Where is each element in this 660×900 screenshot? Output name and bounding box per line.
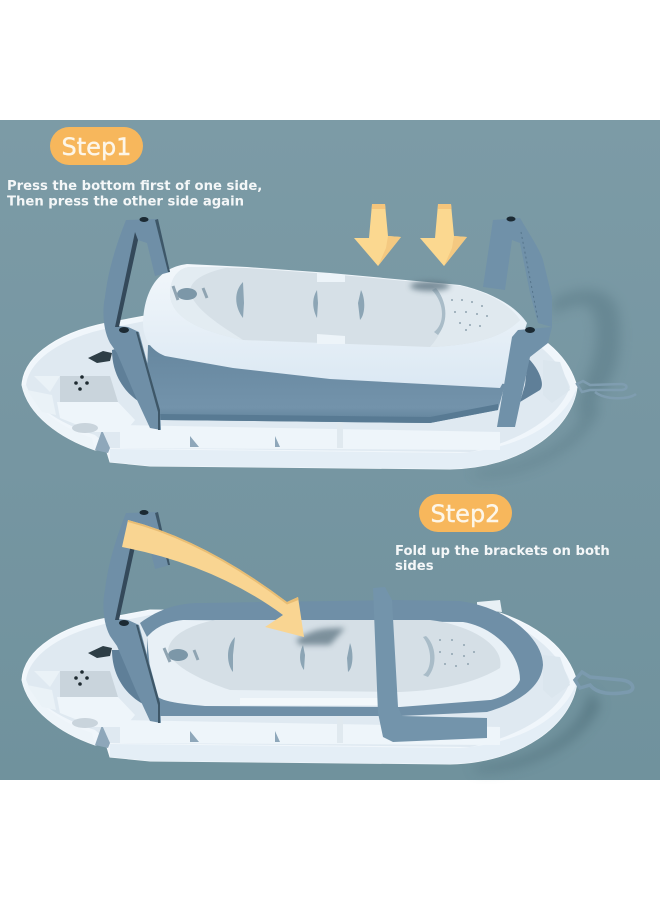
step 2 left bracket bbox=[103, 510, 170, 723]
step 2 bath base tray bbox=[22, 610, 577, 764]
step 2 perforated seat panel bbox=[439, 639, 475, 667]
step 2 seat ridges bbox=[228, 637, 352, 672]
step 2 tub illustration bbox=[22, 510, 633, 771]
step 2 tray shadow bbox=[470, 690, 600, 771]
arrow: press down left bbox=[354, 204, 401, 266]
arrow: big curved fold arrow bbox=[122, 520, 304, 637]
step 2 blue frame band bbox=[140, 600, 543, 716]
arrow: press down right bbox=[420, 204, 467, 266]
step 1 back right bracket bbox=[483, 218, 552, 327]
step 1 left bracket bbox=[103, 217, 170, 430]
step 2 heading pill: Step2 bbox=[431, 500, 500, 528]
step 1 hanging loop bbox=[577, 381, 636, 398]
step 2 instructions: sides bbox=[395, 559, 434, 574]
step 2 seat shadow bbox=[296, 628, 345, 645]
step 1 tub illustration bbox=[22, 216, 636, 476]
step 1 instructions bbox=[7, 179, 262, 210]
step 1 instructions: Press the bottom first of one side, bbox=[7, 179, 262, 194]
step 2 heading pill bbox=[419, 494, 512, 532]
step 1 shadows bbox=[470, 290, 620, 476]
tub blue body bbox=[146, 345, 505, 423]
step 2 drain plug bbox=[168, 649, 188, 661]
step 2 left tub curve bbox=[112, 650, 150, 705]
step 2 hanging loop bbox=[575, 672, 633, 694]
step 1 front right bracket bbox=[497, 216, 552, 427]
step 2 corner clips bbox=[477, 600, 502, 612]
seat shadow bbox=[410, 281, 450, 291]
step 2 instructions bbox=[395, 544, 610, 574]
tub top plate bbox=[170, 267, 520, 347]
step 1 heading pill bbox=[50, 127, 143, 165]
tub side curves bbox=[112, 345, 542, 405]
background panel bbox=[0, 120, 660, 780]
step 1 bath base tray bbox=[22, 315, 577, 469]
step 1 collapsed tub bbox=[112, 264, 542, 423]
drain plug bbox=[177, 288, 197, 300]
step 2 right bracket L-shape bbox=[373, 587, 487, 742]
seat ridges bbox=[236, 282, 364, 320]
step 1 instructions: Then press the other side again bbox=[7, 194, 244, 210]
step 2 folded tub plate bbox=[147, 620, 520, 707]
tub white rim bbox=[143, 264, 527, 388]
perforated seat panel bbox=[451, 299, 488, 331]
step 2 instructions: Fold up the brackets on both bbox=[395, 544, 610, 559]
step 1 heading pill: Step1 bbox=[62, 133, 131, 161]
